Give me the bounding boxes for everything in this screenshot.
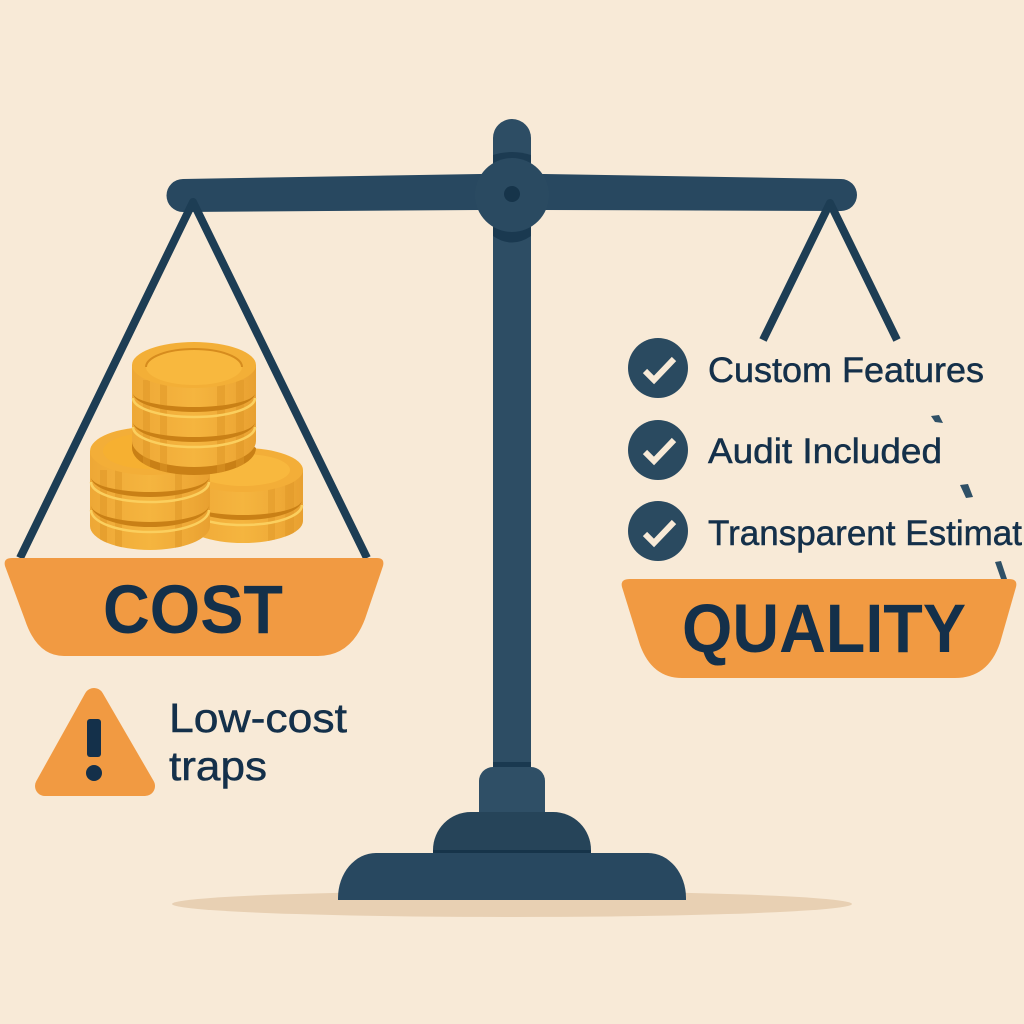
base plate — [338, 853, 686, 900]
checklist item: audit included — [628, 420, 942, 480]
base dome — [433, 812, 591, 853]
coins right stack — [202, 448, 304, 543]
scale stand — [338, 119, 686, 900]
left pan: cost — [5, 558, 383, 656]
pivot — [475, 158, 549, 232]
checklist item: transparent estimate: Transparent Estimat — [708, 514, 1022, 553]
checklist item: audit included: Audit Included — [708, 432, 942, 471]
checklist item: transparent estimate — [628, 501, 1022, 561]
column — [493, 119, 531, 770]
quality label: QUALITY — [682, 590, 966, 667]
coins top stack — [132, 342, 256, 475]
ground shadow — [172, 891, 852, 917]
warning icon — [45, 698, 145, 786]
cost label: COST — [103, 571, 283, 648]
infographic canvas — [4, 119, 1022, 917]
base block — [479, 767, 545, 812]
coins left stack — [90, 427, 210, 555]
broken string fragments — [931, 415, 1007, 579]
coin stacks — [90, 342, 303, 555]
left hanging strings — [20, 202, 367, 558]
low-cost traps note: Low-cost — [169, 695, 348, 741]
beam — [166, 174, 857, 212]
checklist item: custom features: Custom Features — [708, 351, 984, 390]
low-cost traps note — [169, 695, 348, 789]
checklist item: custom features — [628, 338, 984, 398]
right hanging strings — [763, 203, 897, 340]
low-cost traps note: traps — [169, 743, 267, 789]
right pan: quality — [622, 579, 1016, 678]
